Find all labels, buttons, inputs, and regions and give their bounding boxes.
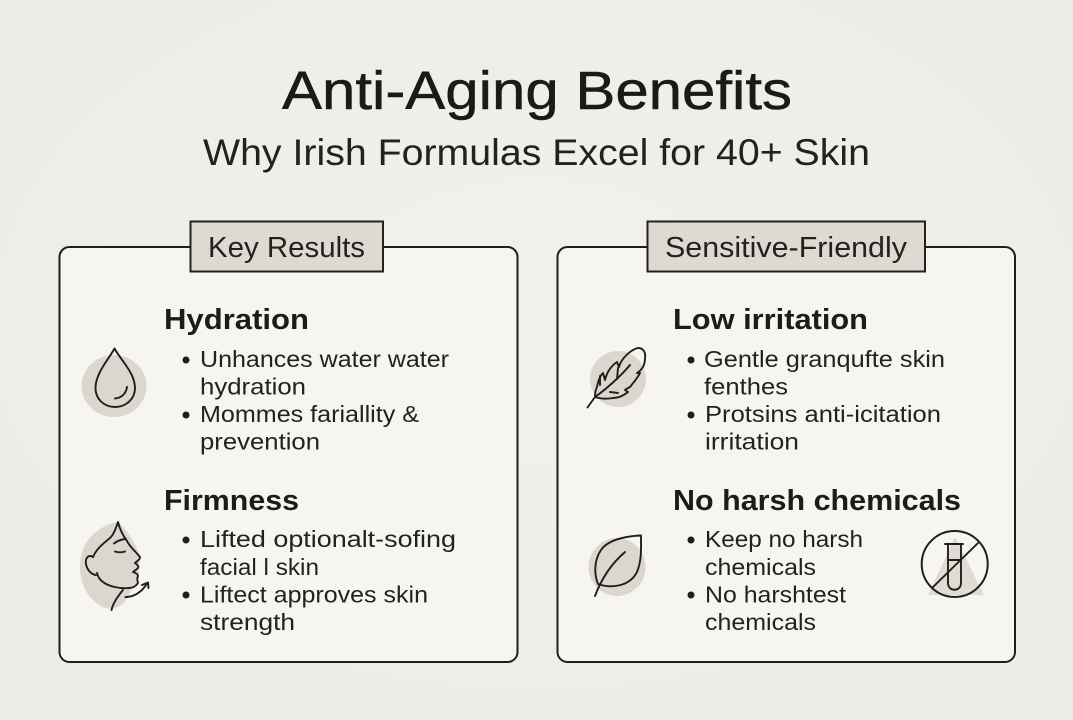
icon: no chemicals test tube — [922, 531, 988, 597]
tag: sensitive-friendly — [648, 222, 925, 272]
subtitle: Why Irish Formulas Excel for 40+ Skin — [203, 131, 870, 173]
list: no harsh chemicals bullets: chemicals — [705, 554, 816, 580]
list: hydration bullets: Unhances water water — [200, 346, 449, 372]
heading: hydration: Hydration — [164, 304, 309, 336]
tag: key results — [190, 222, 383, 272]
tag: key results: Key Results — [208, 232, 365, 264]
heading: firmness: Firmness — [164, 485, 299, 517]
list: firmness bullets: Liftect approves skin — [200, 582, 428, 608]
list: hydration bullets: prevention — [200, 428, 320, 454]
list: low irritation bullets: irritation — [705, 428, 799, 454]
panel: sensitive-friendly — [558, 222, 1015, 662]
list: hydration bullets: Mommes fariallity & — [200, 401, 419, 427]
list: low irritation bullets: fenthes — [704, 374, 788, 400]
list: low irritation bullets: Protsins anti-icitation — [705, 401, 941, 427]
heading: low irritation: Low irritation — [673, 304, 868, 336]
panel: key results — [60, 222, 518, 662]
icon: face profile — [80, 522, 148, 610]
list: no harsh chemicals bullets: chemicals — [705, 609, 816, 635]
list: hydration bullets: hydration — [200, 374, 306, 400]
title: Anti-Aging Benefits — [282, 61, 792, 121]
list: no harsh chemicals bullets — [688, 526, 863, 635]
tag: sensitive-friendly: Sensitive-Friendly — [665, 232, 908, 264]
icon: feather — [588, 348, 646, 408]
list: low irritation bullets — [688, 346, 945, 454]
list: firmness bullets: Lifted optionalt-sofing — [200, 526, 456, 552]
list: firmness bullets — [182, 526, 456, 635]
icon: water drop — [82, 348, 146, 417]
list: hydration bullets — [182, 346, 449, 454]
list: firmness bullets: strength — [200, 609, 295, 635]
list: low irritation bullets: Gentle granqufte skin — [704, 346, 945, 372]
heading: no harsh chemicals: No harsh chemicals — [673, 485, 961, 517]
list: no harsh chemicals bullets: Keep no harsh — [705, 526, 863, 552]
list: no harsh chemicals bullets: No harshtest — [705, 582, 846, 608]
icon: leaf — [588, 536, 646, 596]
list: firmness bullets: facial l skin — [200, 554, 319, 580]
